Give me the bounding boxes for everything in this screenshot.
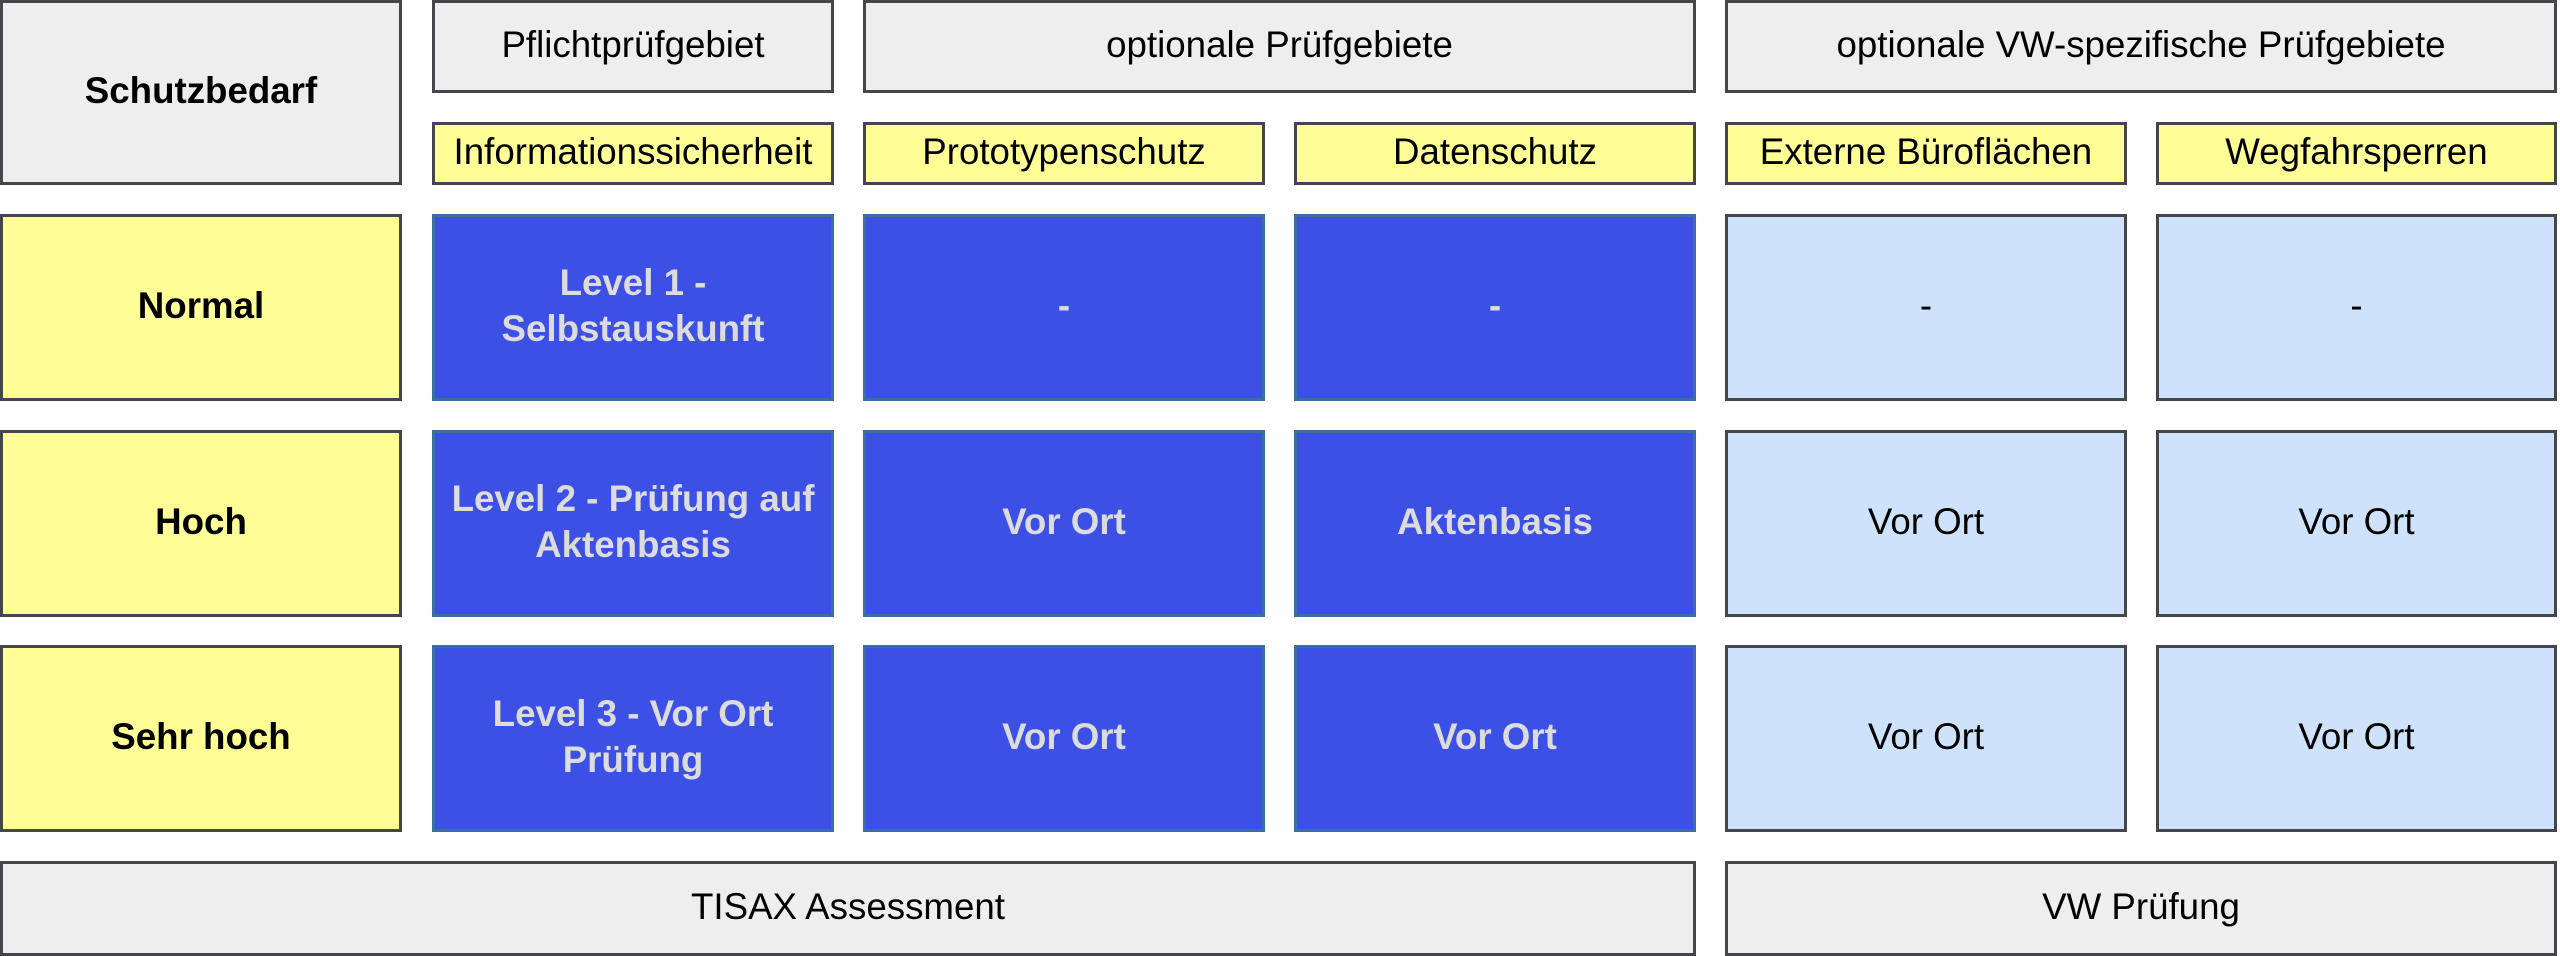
cell: Hoch, Informationssicherheit: Aktenbasis (535, 524, 731, 564)
cell: Sehr hoch, Prototypenschutz (863, 645, 1265, 832)
cell: Sehr hoch, Externe Büroflächen: Vor Ort (1868, 716, 1984, 756)
row header: Hoch (0, 430, 402, 617)
heading: Pflichtprüfgebiet: Pflichtprüfgebiet (501, 24, 765, 64)
column header: Prototypenschutz: Prototypenschutz (922, 130, 1206, 172)
cell: Normal, Informationssicherheit: Selbstauskunft (502, 308, 764, 348)
column header: Externe Büroflächen: Externe Büroflächen (1760, 130, 2092, 172)
cell: Sehr hoch, Externe Büroflächen (1725, 645, 2127, 832)
heading: optionale VW-spezifische Prüfgebiete (1725, 0, 2557, 93)
cell: Normal, Externe Büroflächen: - (1920, 284, 1932, 326)
column header: Informationssicherheit (432, 122, 834, 185)
footer: TISAX Assessment (0, 861, 1696, 956)
cell: Hoch, Datenschutz: Aktenbasis (1397, 500, 1593, 542)
cell: Normal, Prototypenschutz: - (1058, 284, 1070, 326)
cell: Normal, Informationssicherheit: Level 1 - (560, 262, 706, 302)
cell: Hoch, Prototypenschutz: Vor Ort (1002, 500, 1126, 542)
heading: optionale Prüfgebiete (863, 0, 1696, 93)
column header: Externe Büroflächen (1725, 122, 2127, 185)
cell: Hoch, Wegfahrsperren: Vor Ort (2298, 500, 2415, 542)
row header: Sehr hoch: Sehr hoch (111, 716, 291, 756)
column header: Prototypenschutz (863, 122, 1265, 185)
row header: Hoch: Hoch (155, 500, 247, 542)
footer: VW Prüfung: VW Prüfung (2042, 886, 2240, 926)
footer: TISAX Assessment: TISAX Assessment (691, 886, 1005, 926)
cell: Normal, Informationssicherheit (432, 214, 834, 401)
cell: Normal, Externe Büroflächen (1725, 214, 2127, 401)
cell: Normal, Datenschutz: - (1489, 284, 1501, 326)
column header: Wegfahrsperren: Wegfahrsperren (2225, 130, 2488, 172)
column header: Datenschutz: Datenschutz (1393, 130, 1597, 172)
cell: Hoch, Externe Büroflächen: Vor Ort (1868, 500, 1984, 542)
heading: optionale VW-spezifische Prüfgebiete: optionale VW-spezifische Prüfgebiete (1836, 24, 2446, 64)
cell: Hoch, Datenschutz (1294, 430, 1696, 617)
cell: Sehr hoch, Datenschutz: Vor Ort (1433, 716, 1557, 756)
cell: Sehr hoch, Informationssicherheit: Level 3 - Vor Ort (493, 692, 773, 734)
cell: Normal, Datenschutz (1294, 214, 1696, 401)
cell: Hoch, Informationssicherheit (432, 430, 834, 617)
row header: Normal (0, 214, 402, 401)
column header: Informationssicherheit: Informationssicherheit (454, 130, 812, 172)
footer: VW Prüfung (1725, 861, 2557, 956)
cell: Sehr hoch, Wegfahrsperren: Vor Ort (2298, 716, 2415, 756)
cell: Hoch, Externe Büroflächen (1725, 430, 2127, 617)
row header: Normal: Normal (138, 284, 264, 326)
heading: optionale Prüfgebiete: optionale Prüfgebiete (1106, 24, 1453, 64)
cell: Sehr hoch, Prototypenschutz: Vor Ort (1002, 716, 1126, 756)
cell: Sehr hoch, Datenschutz (1294, 645, 1696, 832)
heading: Schutzbedarf: Schutzbedarf (85, 70, 317, 110)
heading: Schutzbedarf (0, 0, 402, 185)
cell: Normal, Wegfahrsperren: - (2350, 284, 2363, 326)
cell: Sehr hoch, Wegfahrsperren (2156, 645, 2557, 832)
cell: Hoch, Prototypenschutz (863, 430, 1265, 617)
cell: Normal, Wegfahrsperren (2156, 214, 2557, 401)
cell: Sehr hoch, Informationssicherheit: Prüfung (563, 738, 703, 780)
column header: Wegfahrsperren (2156, 122, 2557, 185)
heading: Pflichtprüfgebiet (432, 0, 834, 93)
cell: Sehr hoch, Informationssicherheit (432, 645, 834, 832)
cell: Normal, Prototypenschutz (863, 214, 1265, 401)
column header: Datenschutz (1294, 122, 1696, 185)
cell: Hoch, Informationssicherheit: Level 2 - Prüfung auf (452, 478, 814, 518)
cell: Hoch, Wegfahrsperren (2156, 430, 2557, 617)
row header: Sehr hoch (0, 645, 402, 832)
